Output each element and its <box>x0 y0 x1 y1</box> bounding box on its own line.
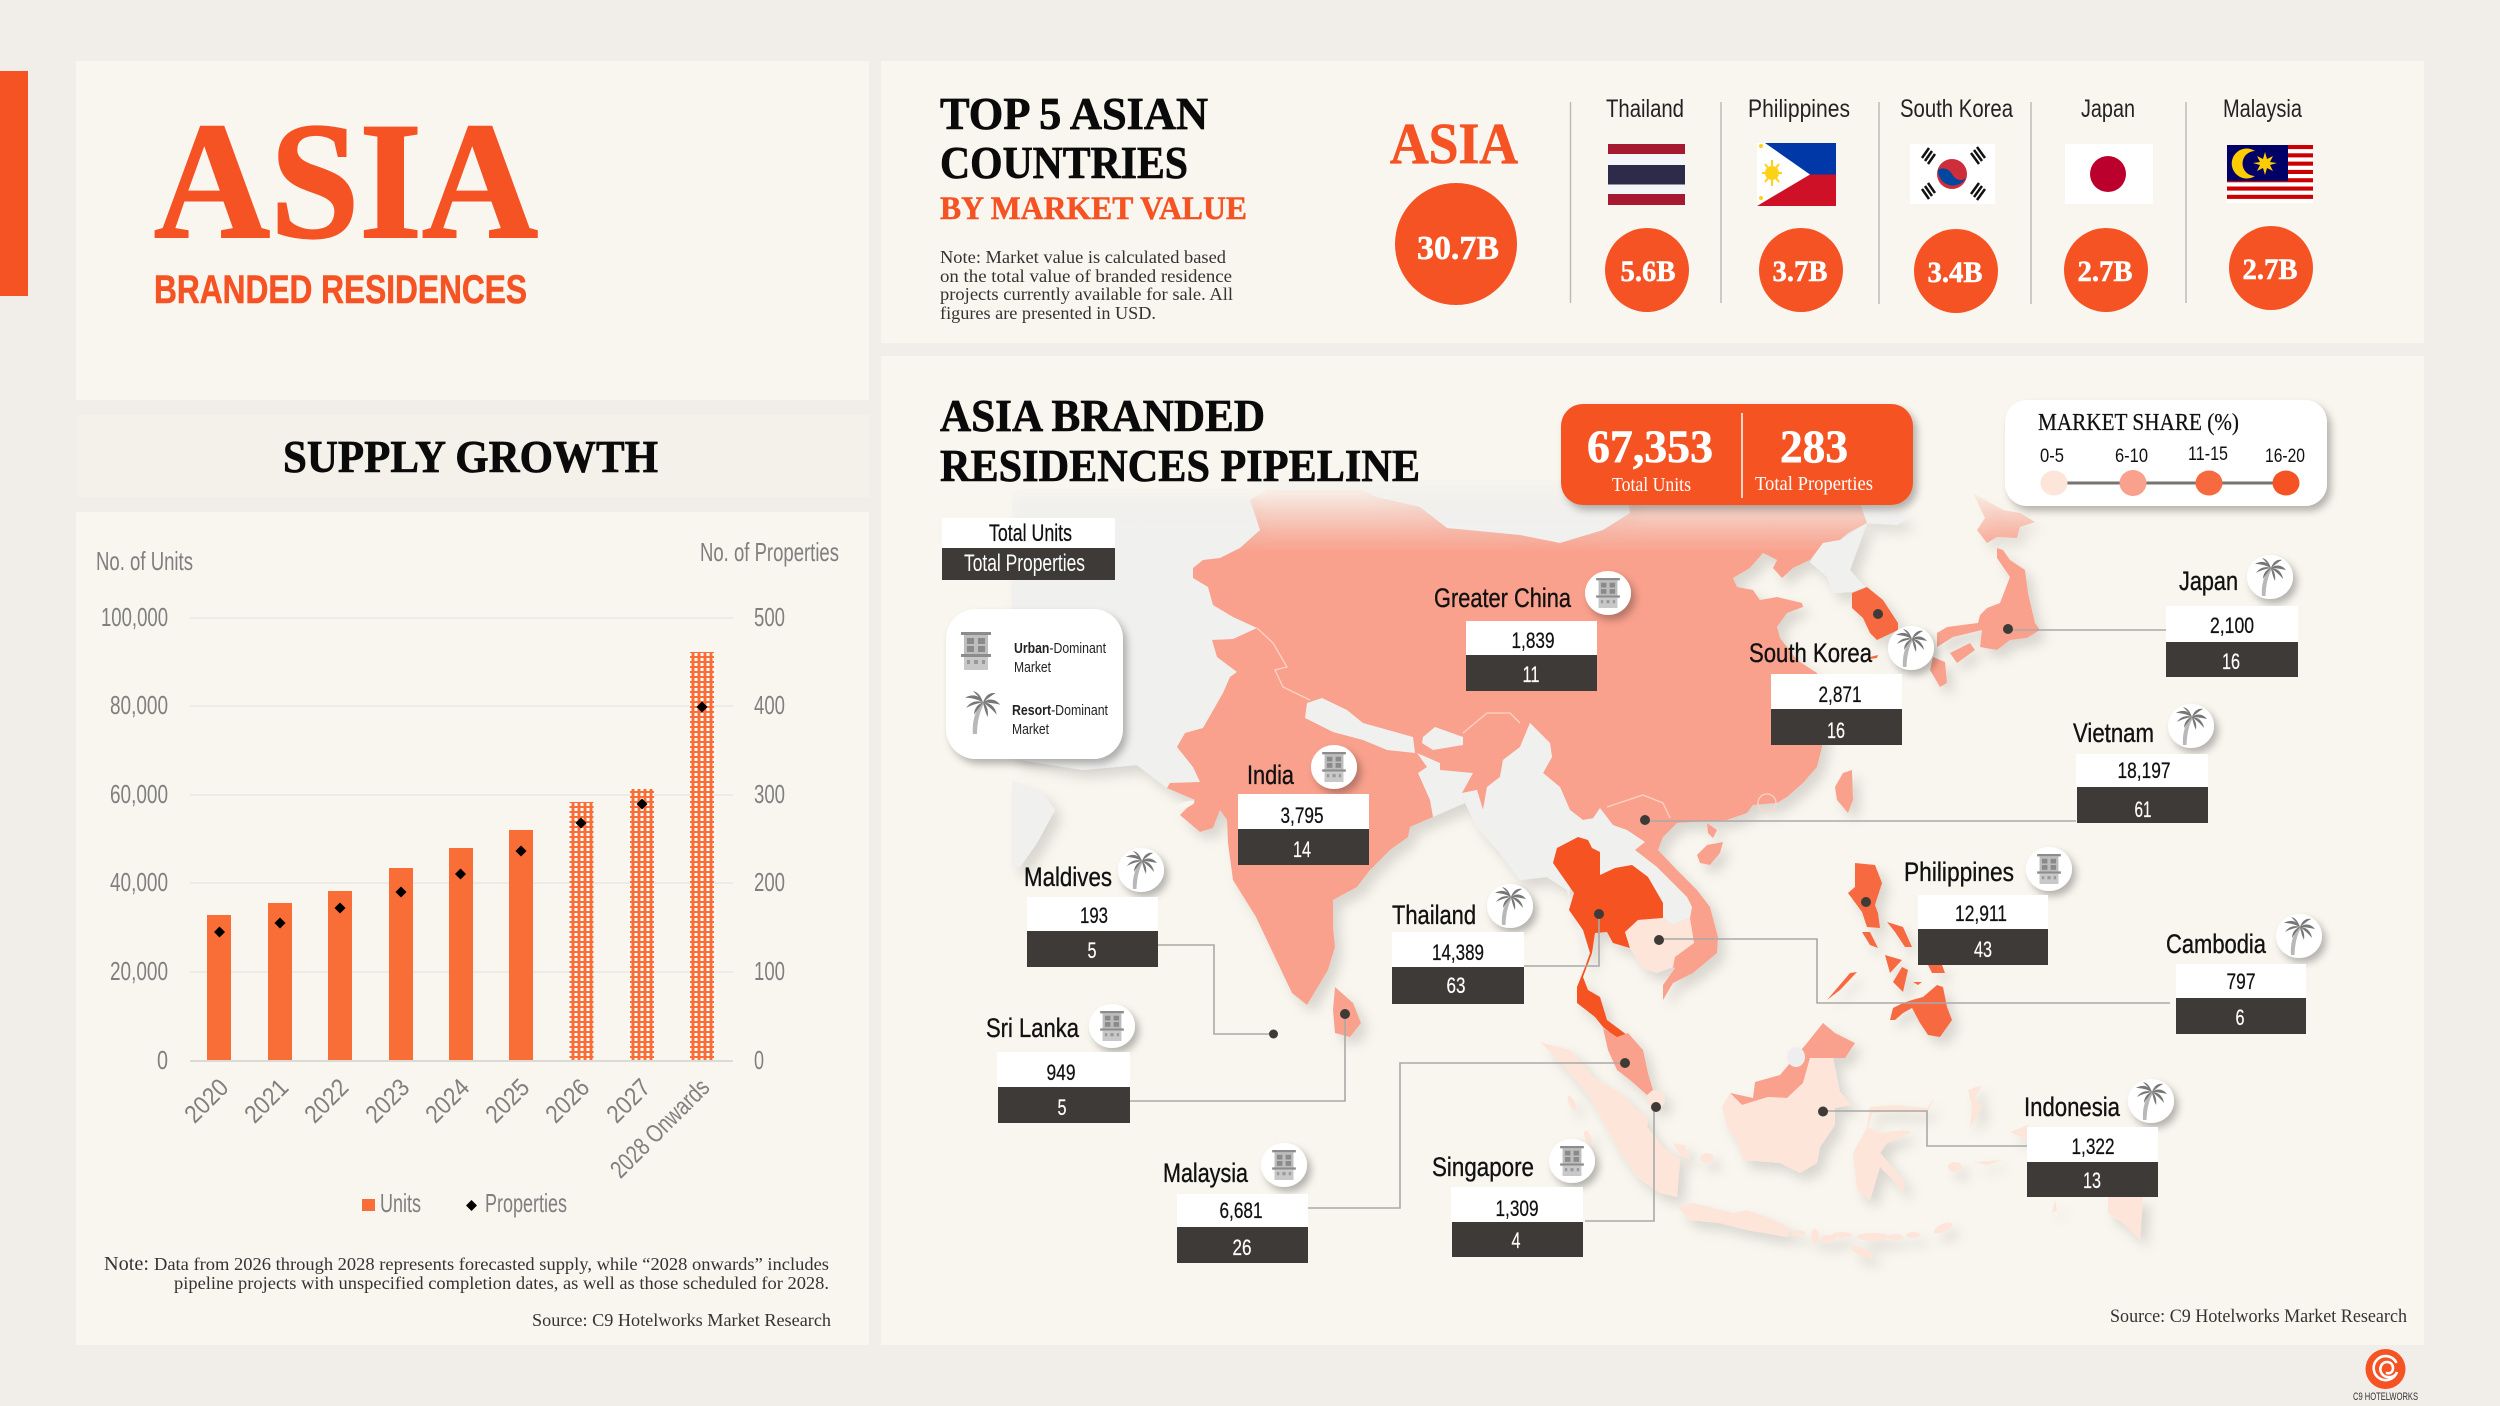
map: South Korea <box>1852 587 1898 659</box>
chart source: Source: C9 Hotelworks Market Research <box>532 1310 831 1330</box>
callout: Vietnam: 18,197 <box>2118 758 2170 783</box>
map: Thailand <box>1553 837 1663 1038</box>
callout: Vietnam <box>2073 704 2214 823</box>
right axis labels: 500 <box>754 602 785 632</box>
map: Nepal, Bhutan, Bangladesh, Myanmar, Laos <box>1305 698 1692 960</box>
callout: Japan: Japan <box>2179 566 2238 596</box>
stat: Asia total: ASIA <box>1390 111 1518 176</box>
country: Thailand: Thailand <box>1606 95 1684 123</box>
x axis labels: 2026 <box>540 1073 595 1129</box>
callout: Singapore: Singapore <box>1432 1152 1534 1182</box>
legend: market share: 0-5 <box>2040 446 2064 467</box>
totals callout: 67,353 <box>1587 421 1713 473</box>
callout: Philippines: Philippines <box>1904 857 2014 887</box>
legend: market share <box>2005 400 2327 506</box>
totals callout: Total Properties <box>1755 473 1873 495</box>
logo: C9 Hotelworks <box>2353 1349 2418 1403</box>
legend: box key: Total Units <box>989 520 1072 547</box>
map heading <box>940 390 1420 491</box>
country: Philippines: Philippines <box>1748 95 1850 123</box>
callout: Vietnam: Vietnam <box>2073 718 2154 748</box>
legend: market share: 6-10 <box>2115 446 2148 467</box>
map source: Source: C9 Hotelworks Market Research <box>2110 1306 2407 1327</box>
country: Thailand <box>1605 95 1689 312</box>
callout: Singapore: 4 <box>1512 1228 1520 1253</box>
country: Philippines <box>1748 95 1850 312</box>
icon: urban building <box>961 632 991 670</box>
left axis labels: 20,000 <box>110 956 168 986</box>
panel: top 5 countries <box>881 61 2424 343</box>
callout: South Korea <box>1749 626 1934 745</box>
callout: Cambodia: Cambodia <box>2166 929 2267 959</box>
x axis labels: 2023 <box>360 1073 415 1129</box>
callout: South Korea: South Korea <box>1749 638 1873 668</box>
callout: Singapore: 1,309 <box>1496 1196 1538 1221</box>
callout: Philippines <box>1904 847 2072 965</box>
subtitle: BRANDED RESIDENCES <box>154 268 527 312</box>
country: South Korea <box>1900 95 2013 313</box>
totals callout: Total Units <box>1612 474 1691 496</box>
heading: top 5: TOP 5 ASIAN <box>940 88 1208 139</box>
right axis labels: 0 <box>754 1045 764 1075</box>
callout: Indonesia: 13 <box>2083 1168 2101 1193</box>
right axis labels: 300 <box>754 779 785 809</box>
callout: South Korea: 16 <box>1827 718 1845 743</box>
callout: India: 3,795 <box>1280 803 1324 828</box>
panel: pipeline map <box>881 356 2424 1345</box>
x axis labels <box>179 1073 715 1184</box>
callout: Thailand <box>1392 884 1533 1004</box>
panel: supply growth chart <box>76 512 869 1345</box>
chart note <box>104 1253 829 1293</box>
title: ASIA: ASIA <box>154 89 538 274</box>
panel: supply growth heading <box>78 415 869 497</box>
callout: Philippines: 12,911 <box>1955 901 2007 926</box>
legend: market type: Market <box>1014 659 1052 676</box>
logo: C9 Hotelworks: C9 HOTELWORKS <box>2353 1391 2418 1403</box>
callout: India <box>1238 745 1369 865</box>
note: market value <box>940 247 1233 323</box>
accent bar <box>0 71 28 296</box>
map: Philippines <box>1827 863 1952 1037</box>
connector lines <box>1130 630 2170 1221</box>
legend: market share: 11-15 <box>2188 444 2228 465</box>
left axis labels: 80,000 <box>110 690 168 720</box>
legend: market type: Market <box>1012 721 1050 738</box>
x axis labels: 2028 Onwards <box>605 1073 715 1184</box>
x axis labels: 2024 <box>420 1073 475 1129</box>
country: Japan <box>2064 95 2153 312</box>
callout: Singapore <box>1432 1139 1595 1257</box>
callout: Maldives <box>1024 848 1164 967</box>
right axis labels: 200 <box>754 867 785 897</box>
legend: market share: 16-20 <box>2265 446 2305 467</box>
stat: Asia total: 30.7B <box>1417 230 1499 267</box>
callout: Cambodia <box>2166 914 2322 1034</box>
flag: Malaysia <box>2227 145 2313 203</box>
country: Malaysia <box>2223 95 2313 310</box>
callout: Sri Lanka <box>986 1004 1135 1123</box>
left axis labels: 60,000 <box>110 779 168 809</box>
totals callout <box>1561 404 1913 505</box>
map: China, India, Vietnam <box>1167 490 1867 1005</box>
left axis labels <box>101 602 168 1075</box>
map heading: RESIDENCES PIPELINE <box>940 440 1420 491</box>
chart legend <box>362 1188 567 1218</box>
callout: Thailand: 63 <box>1446 973 1466 998</box>
callout: Malaysia: Malaysia <box>1163 1158 1249 1188</box>
location dots <box>1269 609 2013 1116</box>
axis title: units: No. of Units <box>96 546 193 576</box>
bars: units <box>207 652 714 1061</box>
flag: Japan <box>2065 144 2153 204</box>
note: market value: figures are presented in USD. <box>940 303 1156 323</box>
markers: properties <box>214 702 708 938</box>
right axis labels: 100 <box>754 956 785 986</box>
callout: Malaysia: 26 <box>1232 1235 1252 1260</box>
icon: resort palm <box>965 691 1000 734</box>
legend: market share: MARKET SHARE (%) <box>2038 410 2239 436</box>
map: North Korea <box>1810 523 1867 593</box>
map: Taiwan, Hainan, Sri Lanka <box>1333 770 1853 1037</box>
heading: top 5: BY MARKET VALUE <box>940 191 1247 227</box>
callout: Thailand: Thailand <box>1392 900 1476 930</box>
left axis labels: 0 <box>157 1045 168 1075</box>
callout: Vietnam: 61 <box>2134 797 2152 822</box>
callout: Japan <box>2166 555 2298 677</box>
callout: Japan: 16 <box>2222 649 2240 674</box>
flag: Philippines <box>1757 143 1836 206</box>
map heading: ASIA BRANDED <box>940 390 1265 441</box>
totals callout: 283 <box>1780 421 1848 473</box>
callout: Indonesia: Indonesia <box>2024 1092 2121 1122</box>
country: Thailand: 5.6B <box>1620 255 1676 288</box>
legend: market type: Resort-Dominant <box>1012 702 1109 719</box>
callout: Greater China: 1,839 <box>1512 628 1554 653</box>
legend: market type <box>946 609 1123 759</box>
callout: Maldives: 193 <box>1080 903 1108 928</box>
legend: market type: Urban-Dominant <box>1014 640 1107 657</box>
callout: Sri Lanka: Sri Lanka <box>986 1013 1080 1043</box>
callout: Malaysia <box>1163 1143 1308 1263</box>
country: Malaysia: Malaysia <box>2223 95 2302 123</box>
chart note: Note: <box>104 1253 149 1275</box>
map: Malaysia <box>1603 1023 1855 1105</box>
country: Philippines: 3.7B <box>1772 255 1828 288</box>
callout: Greater China <box>1434 571 1631 691</box>
panel: title <box>76 61 869 400</box>
callout: India: India <box>1247 760 1295 790</box>
chart note: Data from 2026 through 2028 represents forecasted supply, while “2028 onwards” includes <box>154 1254 829 1274</box>
callout: Greater China: Greater China <box>1434 583 1572 613</box>
callout: Greater China: 11 <box>1522 662 1540 687</box>
left axis labels: 100,000 <box>101 602 168 632</box>
legend: box key <box>942 518 1115 580</box>
callout: Sri Lanka: 5 <box>1058 1095 1066 1120</box>
callout: India: 14 <box>1293 837 1311 862</box>
left axis labels: 40,000 <box>110 867 168 897</box>
callout: Malaysia: 6,681 <box>1220 1198 1262 1223</box>
callout: Maldives: Maldives <box>1024 862 1112 892</box>
x axis labels: 2027 <box>601 1073 656 1129</box>
callout: Cambodia: 797 <box>2226 969 2256 994</box>
callout: Maldives: 5 <box>1088 938 1096 963</box>
x axis labels: 2025 <box>480 1073 535 1129</box>
right axis labels <box>754 602 785 1075</box>
note: market value: Note: Market value is calculated based <box>940 247 1226 267</box>
country: Japan: Japan <box>2081 95 2135 123</box>
map of Asia <box>1012 480 2143 1261</box>
axis title: properties: No. of Properties <box>700 537 839 567</box>
map: grey non-market countries <box>1012 480 1910 867</box>
callout: Indonesia: 1,322 <box>2072 1134 2114 1159</box>
heading: top 5 <box>940 88 1247 227</box>
callout: South Korea: 2,871 <box>1818 682 1862 707</box>
chart note: pipeline projects with unspecified completion dates, as well as those scheduled for 2028. <box>174 1273 829 1293</box>
map: Indonesia and Singapore <box>1540 1042 2143 1261</box>
note: market value: projects currently available for sale. All <box>940 284 1233 304</box>
chart legend: Units <box>380 1188 421 1218</box>
callout: Cambodia: 6 <box>2236 1005 2244 1030</box>
country: Malaysia: 2.7B <box>2242 253 2298 286</box>
stat: Asia total <box>1390 111 1518 305</box>
heading: top 5: COUNTRIES <box>940 137 1188 188</box>
country: Japan: 2.7B <box>2078 255 2132 288</box>
flag: South Korea <box>1910 144 1995 204</box>
x axis labels: 2020 <box>179 1073 234 1129</box>
country: South Korea: South Korea <box>1900 95 2013 123</box>
callout: Indonesia <box>2024 1079 2174 1197</box>
panel: supply growth heading: SUPPLY GROWTH <box>283 431 658 482</box>
map: Cambodia <box>1625 918 1694 973</box>
legend: box key: Total Properties <box>964 550 1085 577</box>
x axis labels: 2022 <box>299 1073 354 1129</box>
x axis labels: 2021 <box>239 1073 294 1129</box>
callout: Sri Lanka: 949 <box>1046 1060 1076 1085</box>
flag: Thailand <box>1608 144 1685 205</box>
country: South Korea: 3.4B <box>1928 256 1982 289</box>
note: market value: on the total value of branded residence <box>940 266 1232 286</box>
callout: Philippines: 43 <box>1974 937 1992 962</box>
chart legend: Properties <box>485 1188 567 1218</box>
callout: Japan: 2,100 <box>2210 613 2254 638</box>
right axis labels: 400 <box>754 690 785 720</box>
map: Japan <box>1973 493 2035 543</box>
callout: Thailand: 14,389 <box>1432 940 1484 965</box>
